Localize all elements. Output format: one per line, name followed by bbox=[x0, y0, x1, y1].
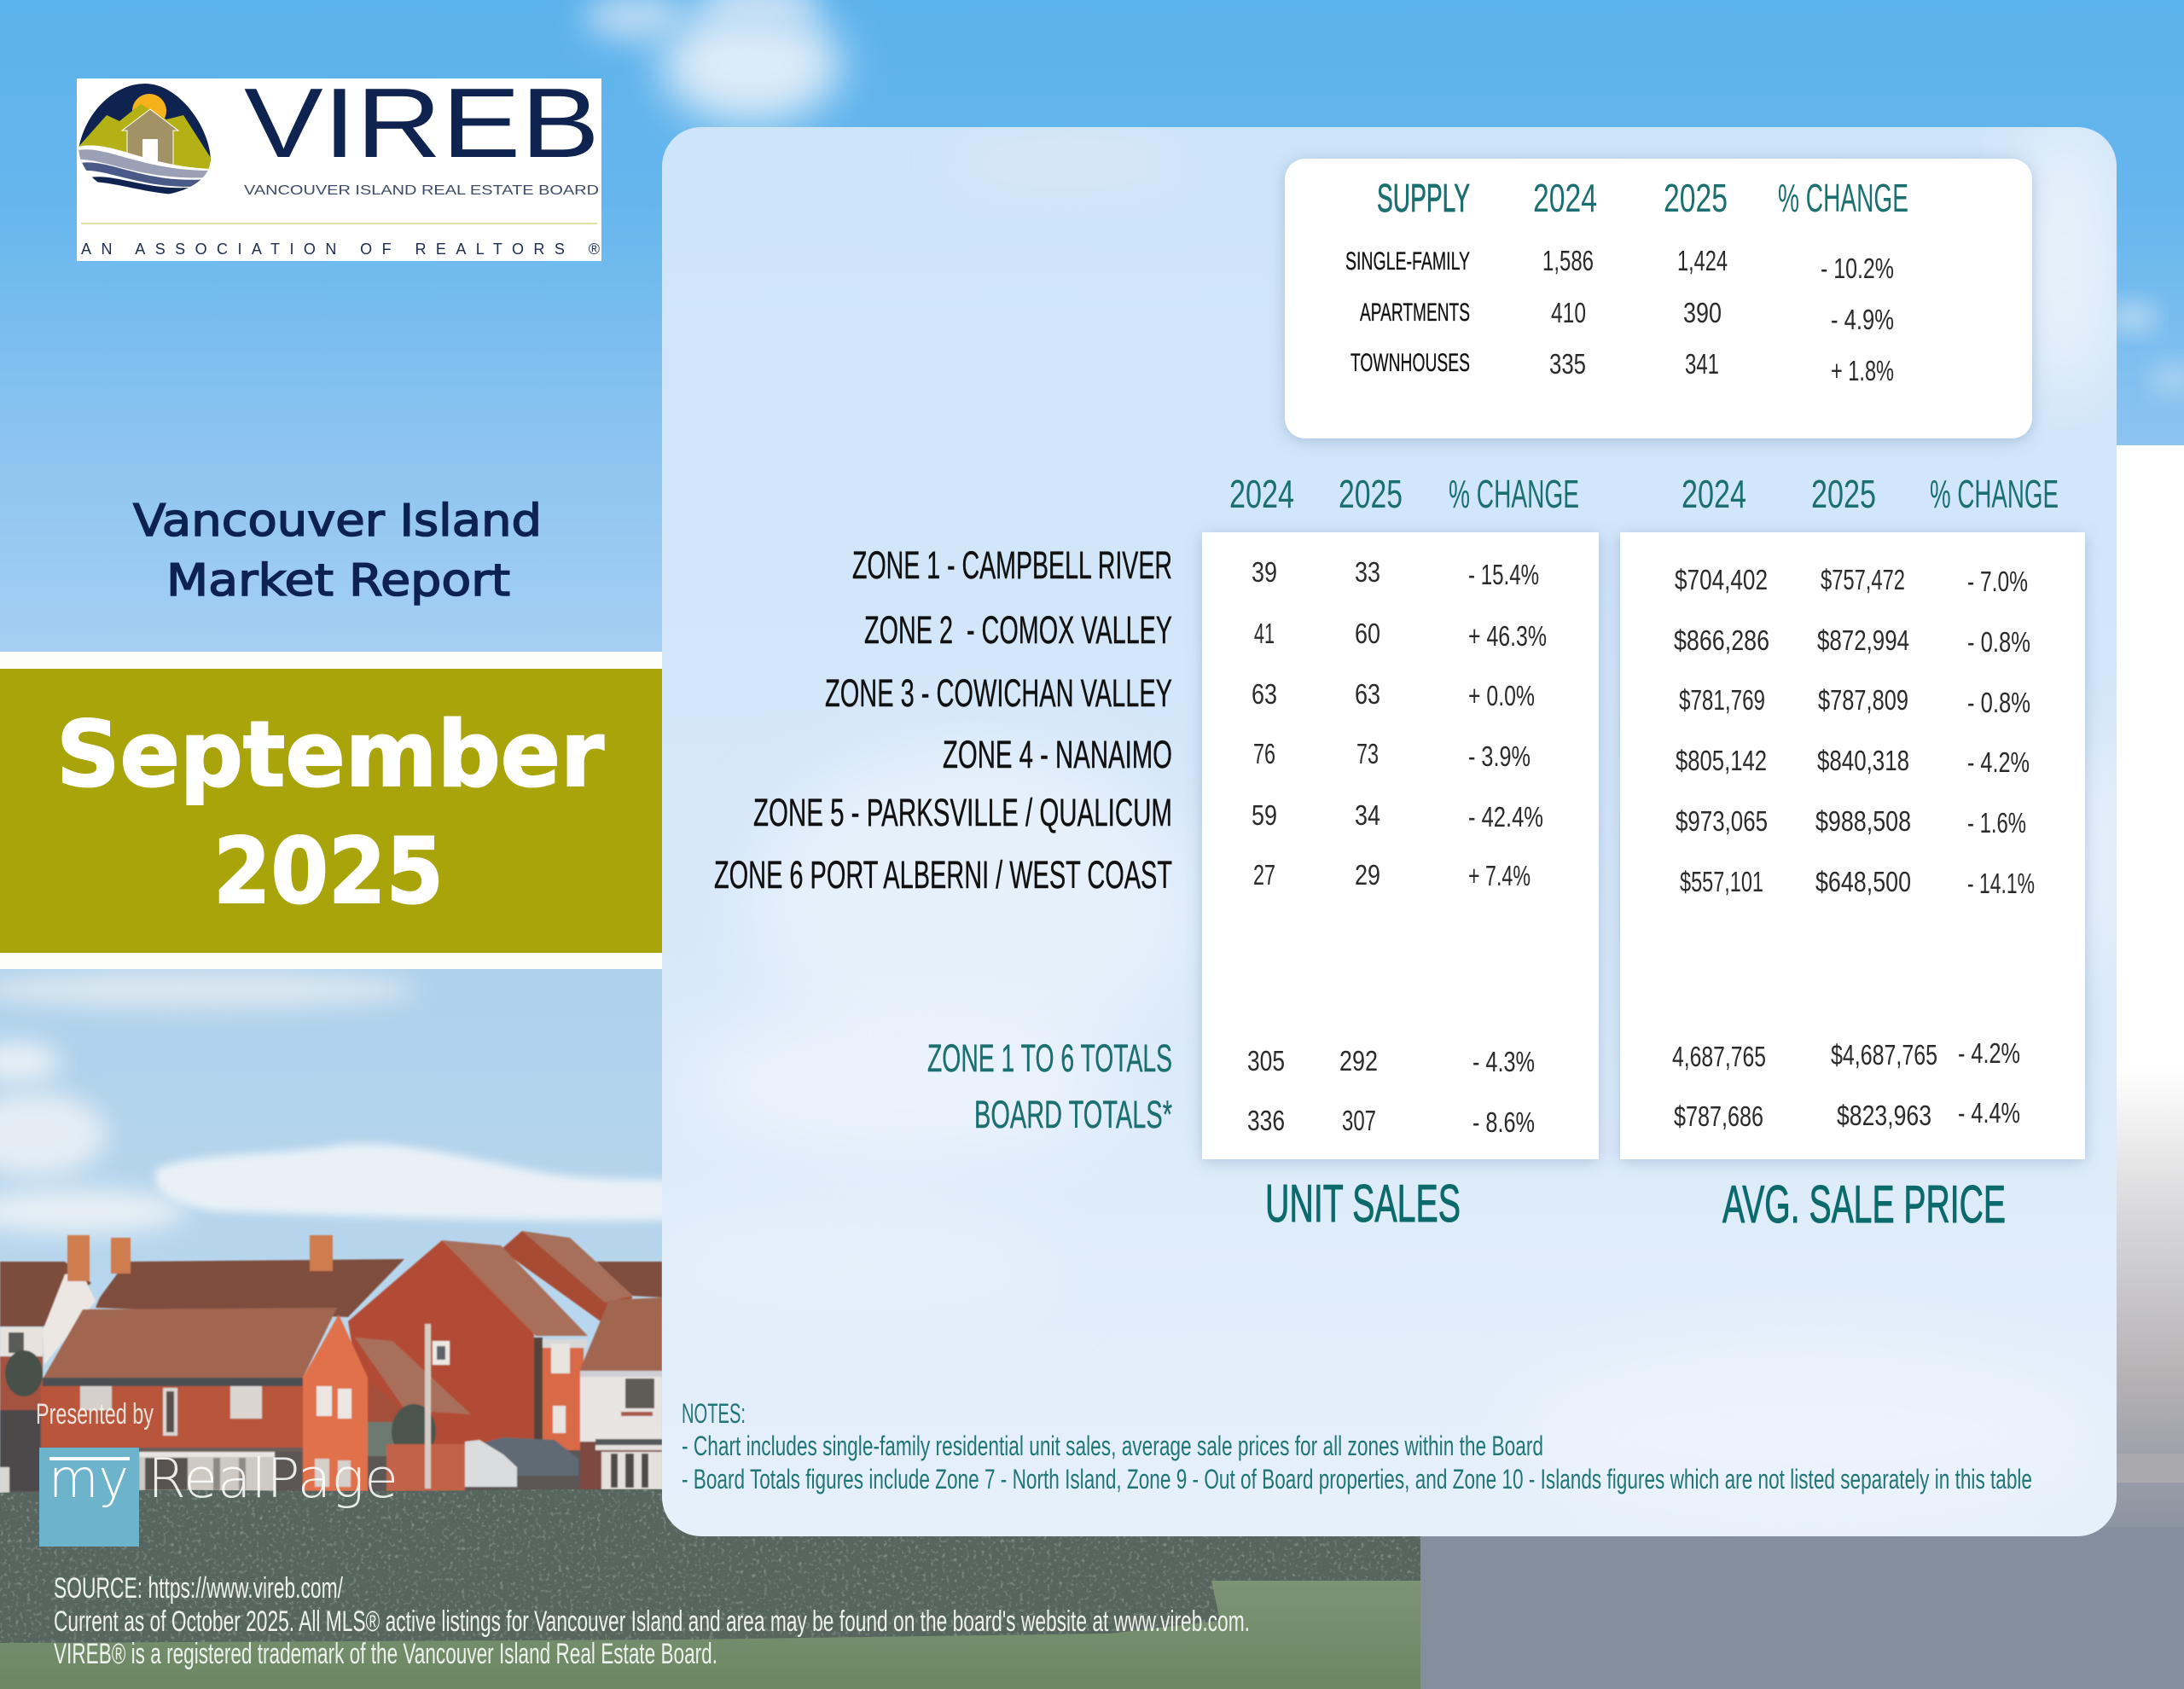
supply header row: 2025 bbox=[1664, 176, 1728, 220]
zone labels: ZONE 3 - COWICHAN VALLEY bbox=[825, 671, 1172, 715]
background: faded lower right ground bbox=[1420, 1454, 2184, 1689]
price: zone 1 bbox=[1675, 564, 2028, 597]
price: zone 1 to 6 totals: - 4.2% bbox=[1958, 1037, 2020, 1069]
logo: VIREB: VANCOUVER ISLAND REAL ESTATE BOARD bbox=[244, 183, 599, 198]
price: zone 6: $557,101 bbox=[1680, 866, 1763, 897]
unit sales: board totals: - 8.6% bbox=[1472, 1106, 1535, 1138]
column headers: unit sales: 2024 bbox=[1229, 472, 1294, 516]
unit sales: zone 3: + 0.0% bbox=[1468, 680, 1535, 711]
supply row: apartments bbox=[1360, 297, 1894, 335]
supply row: apartments: 390 bbox=[1683, 297, 1722, 328]
unit sales: zone 5: 59 bbox=[1252, 799, 1277, 831]
supply header row: 2024 bbox=[1533, 176, 1597, 220]
title: Vancouver Island Market Report: Vancouver Island bbox=[133, 496, 542, 547]
supply row: apartments: APARTMENTS bbox=[1360, 299, 1470, 327]
unit sales: zone 4 bbox=[1253, 738, 1531, 772]
unit sales: zone 1 bbox=[1252, 556, 1539, 590]
price: zone 1 to 6 totals: $4,687,765 bbox=[1831, 1039, 1937, 1071]
price: zone 4: - 4.2% bbox=[1967, 746, 2030, 778]
unit sales: zone 1 to 6 totals bbox=[1247, 1045, 1535, 1077]
supply row: single-family: 1,424 bbox=[1677, 245, 1728, 276]
unit sales: zone 1: - 15.4% bbox=[1468, 559, 1539, 590]
unit sales: zone 1 to 6 totals: 305 bbox=[1247, 1045, 1285, 1077]
price: zone 3: - 0.8% bbox=[1967, 687, 2030, 718]
price: zone 5: - 1.6% bbox=[1967, 807, 2026, 839]
price: board totals bbox=[1674, 1097, 2020, 1132]
title: Vancouver Island Market Report: Market Report bbox=[166, 555, 510, 607]
unit sales: zone 1 to 6 totals: 292 bbox=[1339, 1045, 1378, 1077]
heading: average sale price: AVG. SALE PRICE bbox=[1722, 1175, 2006, 1234]
supply row: single-family: 1,586 bbox=[1542, 245, 1594, 276]
price: zone 1: $704,402 bbox=[1675, 564, 1768, 595]
unit sales: zone 6 bbox=[1253, 859, 1531, 891]
price: zone 1 to 6 totals bbox=[1672, 1037, 2020, 1072]
supply row: single-family bbox=[1345, 245, 1894, 284]
supply header row bbox=[1377, 176, 1908, 220]
totals labels: ZONE 1 TO 6 TOTALS bbox=[927, 1036, 1172, 1080]
price: zone 2: $866,286 bbox=[1674, 624, 1769, 656]
unit sales: zone 4: 73 bbox=[1356, 738, 1379, 769]
background: blue sky bbox=[0, 0, 2184, 682]
unit sales: zone 2: 60 bbox=[1355, 618, 1380, 649]
notes: NOTES: bbox=[682, 1398, 746, 1429]
price: zone 5: $988,508 bbox=[1815, 805, 1911, 837]
price: zone 2 bbox=[1674, 624, 2030, 658]
unit sales: zone 5: 34 bbox=[1355, 799, 1380, 831]
heading: unit sales: UNIT SALES bbox=[1265, 1175, 1461, 1233]
banner: September 2025 bbox=[0, 652, 662, 969]
zone labels: ZONE 2 - COMOX VALLEY bbox=[864, 608, 1172, 652]
title: Vancouver Island Market Report bbox=[133, 496, 542, 607]
unit sales: board totals: 307 bbox=[1342, 1105, 1376, 1136]
logo: VIREB: AN ASSOCIATION OF REALTORS ® bbox=[81, 241, 600, 258]
banner: September 2025: September bbox=[56, 702, 604, 807]
unit sales: board totals: 336 bbox=[1247, 1105, 1285, 1136]
footer: source and disclaimer: Current as of October 2025. All MLS® active listings for Vancouver Island and area may be found on the board's website at www.vireb.com. bbox=[54, 1605, 1250, 1638]
unit sales: zone 2: + 46.3% bbox=[1468, 620, 1547, 652]
supply header row: % CHANGE bbox=[1778, 176, 1908, 220]
card: supply table bbox=[1285, 159, 2032, 438]
footer: source and disclaimer: SOURCE: https://www.vireb.com/ bbox=[54, 1572, 343, 1605]
logo: myRealPage: my bbox=[49, 1448, 129, 1510]
supply row: single-family: - 10.2% bbox=[1821, 252, 1894, 284]
unit sales: zone 6: 29 bbox=[1355, 859, 1380, 891]
price: zone 6: - 14.1% bbox=[1967, 868, 2035, 899]
column headers: unit sales bbox=[1229, 472, 1579, 516]
unit sales: zone 3 bbox=[1252, 678, 1535, 711]
supply row: townhouses: + 1.8% bbox=[1831, 355, 1894, 386]
price: zone 1: - 7.0% bbox=[1967, 566, 2028, 597]
column headers: average sale price: 2025 bbox=[1811, 472, 1876, 516]
footer: source and disclaimer bbox=[54, 1572, 1250, 1670]
unit sales: zone 1: 33 bbox=[1355, 556, 1380, 588]
footer: source and disclaimer: VIREB® is a registered trademark of the Vancouver Island Real Estate Board. bbox=[54, 1638, 717, 1670]
table: average sale price bbox=[1620, 532, 2085, 1159]
unit sales: zone 4: - 3.9% bbox=[1468, 740, 1531, 772]
table: unit sales bbox=[1202, 532, 1599, 1159]
zone labels: ZONE 1 - CAMPBELL RIVER bbox=[852, 543, 1172, 587]
price: zone 1: $757,472 bbox=[1821, 564, 1905, 595]
hedge and grass bbox=[0, 1484, 1420, 1689]
supply row: townhouses bbox=[1350, 348, 1894, 386]
supply row: townhouses: 341 bbox=[1685, 348, 1719, 380]
column headers: average sale price bbox=[1682, 472, 2059, 516]
unit sales: zone 1 to 6 totals: - 4.3% bbox=[1472, 1046, 1535, 1077]
supply header row: SUPPLY bbox=[1377, 176, 1470, 220]
totals labels bbox=[927, 1036, 1172, 1136]
price: zone 3: $787,809 bbox=[1818, 684, 1908, 716]
price: zone 2: $872,994 bbox=[1817, 624, 1909, 656]
price: zone 3: $781,769 bbox=[1679, 684, 1765, 716]
logo: VIREB: VIREB bbox=[244, 67, 600, 178]
supply row: townhouses: 335 bbox=[1549, 348, 1586, 380]
zone labels bbox=[714, 543, 1172, 897]
supply row: single-family: SINGLE-FAMILY bbox=[1345, 247, 1470, 276]
price: zone 1 to 6 totals: 4,687,765 bbox=[1672, 1041, 1766, 1072]
notes bbox=[682, 1398, 2032, 1495]
column headers: unit sales: % CHANGE bbox=[1449, 472, 1579, 516]
totals labels: BOARD TOTALS* bbox=[974, 1093, 1172, 1136]
supply row: apartments: - 4.9% bbox=[1831, 304, 1894, 335]
unit sales: zone 6: 27 bbox=[1253, 859, 1275, 891]
background: right strip fading into photo bbox=[1962, 445, 2184, 1689]
photo: red brick houses under cloudy sky bbox=[0, 968, 1420, 1689]
unit sales: zone 4: 76 bbox=[1253, 738, 1275, 769]
price: board totals: $787,686 bbox=[1674, 1100, 1763, 1132]
banner: September 2025: 2025 bbox=[213, 819, 444, 924]
unit sales: zone 5: - 42.4% bbox=[1468, 801, 1543, 833]
zone labels: ZONE 5 - PARKSVILLE / QUALICUM bbox=[753, 791, 1172, 834]
unit sales: zone 3: 63 bbox=[1252, 678, 1277, 710]
zone labels: ZONE 6 PORT ALBERNI / WEST COAST bbox=[714, 853, 1172, 897]
price: board totals: $823,963 bbox=[1837, 1100, 1931, 1131]
price: zone 4: $805,142 bbox=[1676, 745, 1767, 776]
unit sales: zone 5 bbox=[1252, 799, 1543, 833]
unit sales: zone 2: 41 bbox=[1254, 618, 1275, 649]
supply row: apartments: 410 bbox=[1551, 297, 1586, 328]
price: zone 6: $648,500 bbox=[1815, 866, 1911, 897]
unit sales: zone 3: 63 bbox=[1355, 678, 1380, 710]
price: zone 3 bbox=[1679, 684, 2030, 718]
unit sales: zone 6: + 7.4% bbox=[1468, 860, 1531, 891]
price: zone 4 bbox=[1676, 745, 2030, 778]
price: zone 5 bbox=[1676, 805, 2026, 839]
zone labels: ZONE 4 - NANAIMO bbox=[943, 733, 1172, 776]
unit sales: zone 2 bbox=[1254, 618, 1547, 652]
column headers: average sale price: 2024 bbox=[1682, 472, 1746, 516]
panel: translucent main report panel bbox=[648, 111, 2124, 1536]
price: zone 2: - 0.8% bbox=[1967, 626, 2030, 658]
logo: VIREB bbox=[77, 67, 601, 261]
price: zone 5: $973,065 bbox=[1676, 805, 1768, 837]
notes: - Chart includes single-family residential unit sales, average sale prices for all zones within the Board bbox=[682, 1431, 1543, 1461]
column headers: average sale price: % CHANGE bbox=[1930, 472, 2059, 516]
unit sales: zone 1: 39 bbox=[1252, 556, 1277, 588]
supply row: townhouses: TOWNHOUSES bbox=[1350, 349, 1470, 377]
label: presented by: Presented by bbox=[36, 1398, 154, 1431]
price: board totals: - 4.4% bbox=[1958, 1097, 2020, 1129]
column headers: unit sales: 2025 bbox=[1339, 472, 1403, 516]
logo: myRealPage: RealPage bbox=[148, 1448, 398, 1510]
icon: VIREB egg emblem bbox=[78, 84, 211, 198]
logo: myRealPage bbox=[39, 1448, 398, 1547]
price: zone 4: $840,318 bbox=[1817, 745, 1909, 776]
price: zone 6 bbox=[1680, 866, 2035, 899]
unit sales: board totals bbox=[1247, 1105, 1535, 1138]
